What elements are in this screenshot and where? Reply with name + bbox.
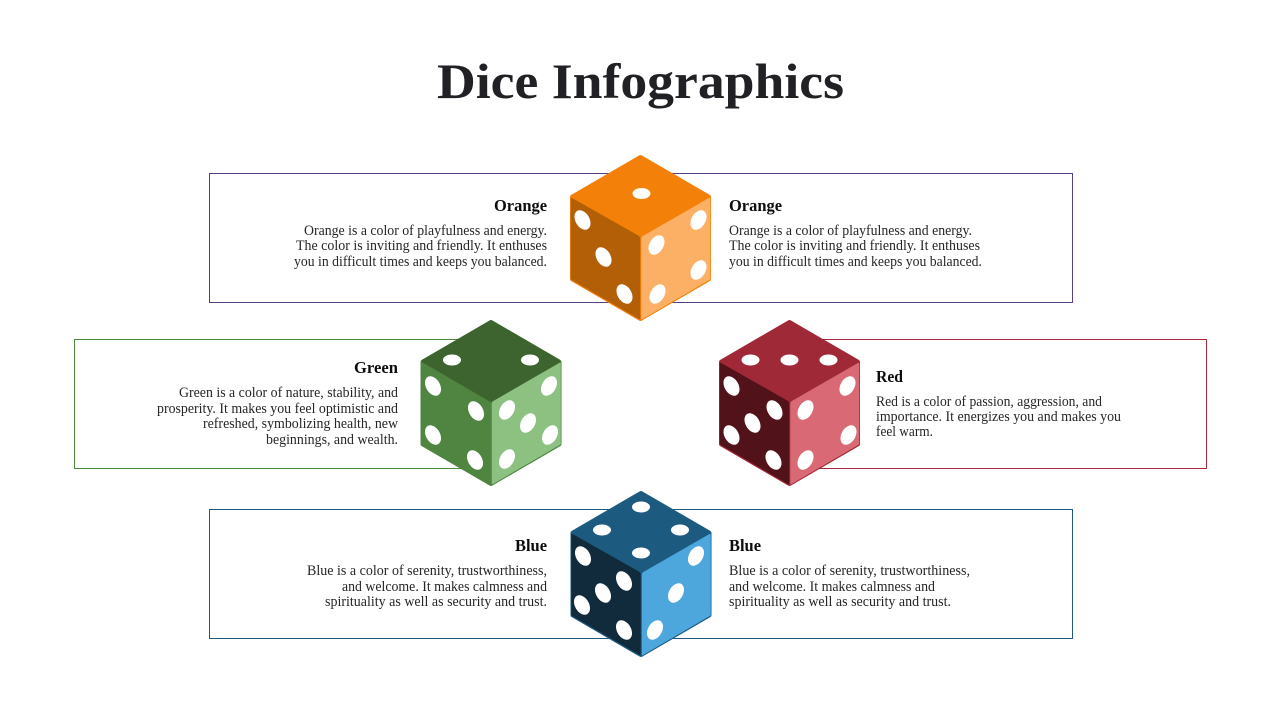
text block: blue left: Blue is a color of serenity, trustworthiness, [307,563,547,579]
text block: red: Red is a color of passion, aggression, and [876,394,1103,410]
text block: orange right: Orange is a color of playfulness and energy. [729,223,972,239]
text block: blue left: Blue [515,536,547,555]
text block: blue right: Blue is a color of serenity, trustworthiness, [729,563,970,579]
text block: green: refreshed, symbolizing health, new [203,416,399,432]
panel: red frame [790,340,1206,468]
text block: green: prosperity. It makes you feel optimistic and [157,401,399,417]
text block: red [876,367,1121,440]
panel: blue frame [210,510,1072,638]
text block: green: Green is a color of nature, stability, and [179,385,399,401]
text block: blue right: Blue [729,536,761,555]
icon: green die [422,322,561,484]
text block: orange left: Orange [494,196,547,215]
text block: green: Green [354,358,399,377]
text block: green [157,358,399,448]
text block: orange left: The color is inviting and friendly. It enthuses [296,238,547,254]
text block: orange right [729,196,982,270]
panel: green frame [74,340,490,468]
text block: orange left: Orange is a color of playfulness and energy. [304,223,547,239]
text block: green: beginnings, and wealth. [266,432,398,448]
text block: orange left: you in difficult times and keeps you balanced. [294,254,547,270]
text block: orange left [294,196,547,270]
panel: orange frame [210,174,1072,302]
text block: blue right: and welcome. It makes calmness and [729,579,936,595]
text block: red: feel warm. [876,424,933,440]
text block: red: importance. It energizes you and makes you [876,409,1121,425]
text block: blue left [307,536,548,610]
text block: orange right: Orange [729,196,782,215]
text block: blue left: spirituality as well as security and trust. [325,594,547,610]
text block: blue right: spirituality as well as security and trust. [729,594,951,610]
icon: red die [720,322,860,484]
text block: orange right: The color is inviting and friendly. It enthuses [729,238,980,254]
text block: blue left: and welcome. It makes calmness and [342,579,548,595]
icon: blue die [571,494,710,654]
text block: red: Red [876,367,903,386]
icon: orange die [571,158,710,318]
title: Dice Infographics [437,53,844,109]
text block: blue right [729,536,970,610]
text block: orange right: you in difficult times and keeps you balanced. [729,254,982,270]
